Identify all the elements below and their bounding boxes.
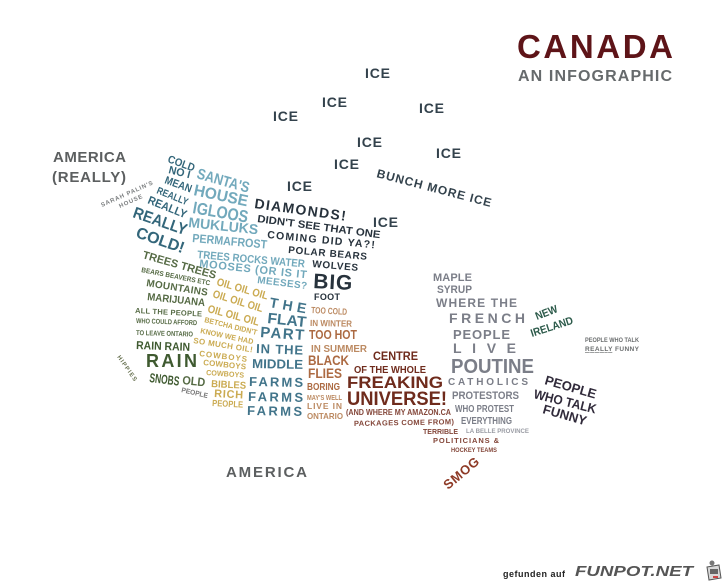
footer logo: FUNPOT.NET [575,563,695,580]
region: British Columbia: PEOPLE [181,387,209,400]
region: Alberta: OIL OIL OIL [211,288,265,315]
region: Yukon [131,154,196,257]
region: Manitoba [307,305,368,421]
footer watermark [503,560,721,580]
region: Northwest Territories: MOOSES (OR IS IT [199,258,308,281]
region: Yukon: COLD! [134,225,187,257]
callout: Labrador note: PEOPLE WHO TALK [585,337,639,344]
region: Saskatchewan: MIDDLE [252,356,304,372]
region: Arctic ice: ICE [436,145,461,161]
region: Arctic ice: ICE [287,178,312,194]
region: Quebec: LIVE [453,340,516,356]
region: Saskatchewan: FARMS [249,374,304,390]
region: Ontario: PACKAGES COME FROM) [354,417,455,428]
region: Newfoundland: IRELAND [529,315,575,340]
region: Alberta: OIL OIL OIL [206,303,261,329]
region: Arctic ice: ICE [334,156,359,172]
region: Manitoba: TOO COLD [311,305,348,317]
region: Quebec: SYRUP [437,284,472,296]
region: Saskatchewan: THE [268,294,308,316]
region: Quebec: EVERYTHING [461,415,512,427]
region: Ontario: UNIVERSE! [347,389,447,410]
region: Saskatchewan: IN THE [256,341,304,358]
region: Manitoba: MAY'S WELL [307,395,343,402]
region: British Columbia: WHO COULD AFFORD [136,318,197,327]
region: Quebec: WHERE THE [436,296,517,310]
region: Northwest Territories: MUKLUKS [188,214,259,237]
region: Ontario: OF THE WHOLE [354,365,426,376]
region: Northwest Territories: MEESES? [257,275,308,292]
heading: Canada: CANADA [517,28,673,65]
region: Arctic ice: ICE [273,108,298,124]
region: British Columbia: RAIN [146,351,197,371]
callout: Labrador note: REALLY FUNNY [585,346,640,353]
region: Arctic ice: ICE [419,100,444,116]
region: Alaska border text: SARAH PALIN'S [100,181,154,209]
region: Manitoba: IN WINTER [310,318,353,329]
region: Quebec: WHO PROTEST [455,403,514,415]
region: Northwest Territories: IGLOOS [191,198,250,227]
region: Ontario: HOCKEY TEAMS [451,447,498,454]
region: British Columbia: TREES TREES [141,249,218,282]
region: Northwest Territories: PERMAFROST [192,231,268,252]
region: Quebec: FRENCH [449,310,525,326]
region: Yukon: REALLY [146,195,189,221]
region: Quebec: PROTESTORS [452,390,519,402]
region: Alberta: COWBOYS [203,358,247,372]
region: Yukon: NO I [167,164,192,181]
region: Northwest Territories [188,166,308,292]
region: British Columbia: TO LEAVE ONTARIO [136,330,194,339]
region: Arctic ice [273,65,493,230]
region: Nunavut: WOLVES [312,259,359,274]
region: Alberta [193,276,270,410]
region: Newfoundland [529,303,575,340]
region: British Columbia [115,249,218,400]
callout: Labrador note [585,337,640,353]
region: Northwest Territories: TREES ROCKS WATER [197,249,305,270]
region: Alberta: RICH [214,388,243,402]
region: Manitoba: ONTARIO [307,411,343,421]
region: Northwest Territories: SANTA'S [195,166,251,197]
region: Alberta: BIBLES [211,379,247,392]
region: Alberta: PEOPLE [212,398,243,410]
region: Ontario: FREAKING [347,373,443,392]
region: British Columbia: MARIJUANA [147,291,206,309]
region: British Columbia: OLD [182,373,206,389]
region: Alberta: OIL OIL OIL [215,276,270,303]
footer text: gefunden auf [503,569,566,579]
region: Yukon: COLD [166,154,196,174]
region: Saskatchewan: FARMS [247,403,303,419]
region: Saskatchewan: FLAT [267,310,307,331]
region: Arctic ice: ICE [373,214,398,230]
region: Alberta: COWBOYS [206,368,244,380]
region: Maritimes: WHO TALK [532,386,599,417]
subtitle: AN INFOGRAPHIC [518,68,672,85]
region: Quebec: PEOPLE [453,327,510,342]
label: America (really) [52,149,126,186]
region: Manitoba: BORING [307,382,340,393]
region: Yukon: REALLY [155,186,190,208]
label: America (really): (REALLY) [52,169,126,186]
region: Quebec [433,272,534,435]
region: Alberta: BETCHA DIDN'T [204,315,258,337]
region: Maritimes [532,372,599,428]
label: America: AMERICA [226,464,307,481]
region: Quebec: CATHOLICS [448,377,528,388]
region: Manitoba: LIVE IN [307,401,342,411]
icon: mug [707,560,721,580]
region: Nunavut: POLAR BEARS [288,245,368,263]
region: Saskatchewan [247,294,308,419]
region: Ontario: TERRIBLE [423,427,458,436]
region: Arctic ice: ICE [357,134,382,150]
region: Ontario: POLITICIANS & [433,436,500,445]
region: Nunavut: DIAMONDS! [254,195,347,224]
region: Manitoba: IN SUMMER [311,344,368,355]
region: Manitoba: FLIES [308,365,342,381]
region: Maritimes: PEOPLE [543,372,599,402]
region: British Columbia: MOUNTAINS [146,278,209,299]
region: Northwest Territories: HOUSE [192,182,250,210]
region: Arctic ice: ICE [365,65,390,81]
region: Ontario [346,351,500,492]
region: Ontario: (AND WHERE MY AMAZON.CA [346,408,451,417]
region: British Columbia: HIPPIES [115,355,137,383]
label: America (really): AMERICA [53,149,126,166]
region: Quebec: POUTINE [451,356,534,378]
region: Alaska border text: HOUSE [118,194,144,210]
title [517,28,673,85]
region: Newfoundland: NEW [534,303,560,323]
region: Ontario: CENTRE [373,351,418,363]
region: Nunavut: DIDN'T SEE THAT ONE [257,213,381,241]
region: Nunavut: COMING DID YA?! [267,229,375,251]
region: British Columbia: RAIN RAIN [136,340,190,354]
region: Quebec: MAPLE [433,272,472,284]
region: Saskatchewan: PART [260,324,305,344]
region: Nunavut [254,195,381,302]
region: Alberta: SO MUCH OIL! [193,336,253,354]
region: Maritimes: FUNNY [541,401,589,428]
region: Arctic ice: BUNCH MORE ICE [375,166,493,210]
region: Ontario: SMOG [440,454,482,492]
region: Yukon: REALLY [131,205,189,239]
region: Nunavut: FOOT [314,292,340,302]
region: Alberta: COWBOYS [199,349,248,364]
region: Manitoba: BLACK [308,352,349,368]
region: British Columbia: SNOBS [149,370,180,389]
region: Saskatchewan: FARMS [248,389,304,405]
region: Nunavut: BIG [313,270,353,295]
region: Alberta: KNOW WE HAD [200,326,255,346]
region: British Columbia: BEARS BEAVERS ETC [141,267,211,287]
region: British Columbia: ALL THE PEOPLE [135,306,202,319]
region: Manitoba: TOO HOT [309,327,357,342]
region: Arctic ice: ICE [322,94,347,110]
region: Yukon: MEAN [163,175,193,195]
region: Quebec: LA BELLE PROVINCE [466,428,530,435]
